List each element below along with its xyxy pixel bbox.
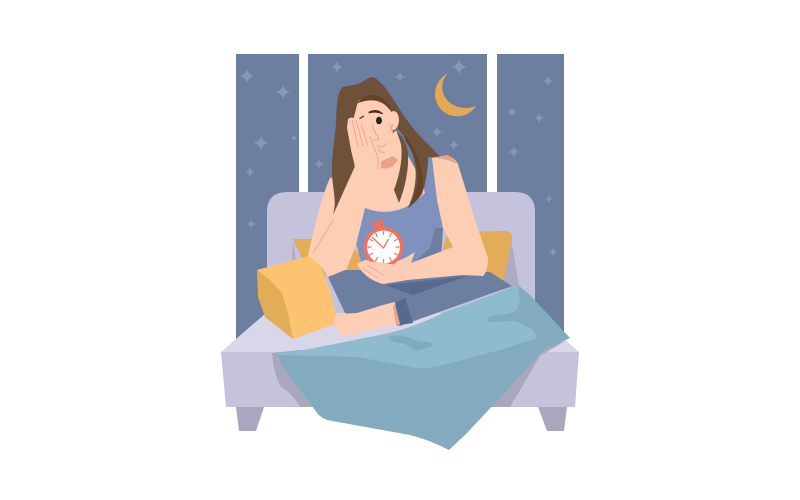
mattress top	[221, 313, 579, 352]
blanket shadow	[272, 341, 565, 407]
hair fringe	[356, 95, 393, 113]
forearm holding face	[308, 164, 378, 277]
neck	[363, 130, 403, 208]
ear	[391, 111, 399, 130]
neck shadow	[378, 156, 398, 168]
hair	[332, 77, 441, 214]
bed legs	[236, 407, 567, 431]
blanket lit fold	[278, 285, 537, 368]
ankle shadow	[393, 303, 399, 324]
trouser cuff	[395, 298, 413, 325]
shoulder shade	[431, 155, 457, 164]
window panes	[236, 54, 564, 344]
holding hand fingers	[357, 261, 411, 284]
tank top side shade	[413, 228, 443, 264]
right shoulder and arm	[357, 155, 488, 284]
hip trousers	[328, 270, 512, 326]
nose and mouth	[372, 124, 393, 153]
stars	[240, 59, 558, 256]
blanket	[278, 285, 570, 450]
finger and arm lines	[313, 120, 378, 253]
moon	[435, 73, 476, 116]
hair strand	[394, 132, 408, 203]
bed front	[221, 352, 579, 407]
woman	[308, 77, 512, 326]
headboard pillow shadows	[291, 238, 519, 290]
eyebrow and eye	[357, 110, 383, 124]
hair inner shade	[405, 135, 423, 208]
upper arm left	[308, 176, 365, 270]
headboard	[267, 192, 535, 340]
tank top	[356, 157, 443, 285]
chest	[358, 150, 425, 211]
hand on face	[347, 118, 381, 177]
trouser shadow	[385, 276, 467, 295]
palm lines	[362, 265, 385, 278]
blanket crease	[388, 335, 433, 351]
front pillow	[257, 256, 338, 339]
face	[352, 98, 393, 160]
foot	[333, 302, 401, 336]
alarm clock	[364, 220, 404, 267]
back pillows	[293, 231, 512, 280]
